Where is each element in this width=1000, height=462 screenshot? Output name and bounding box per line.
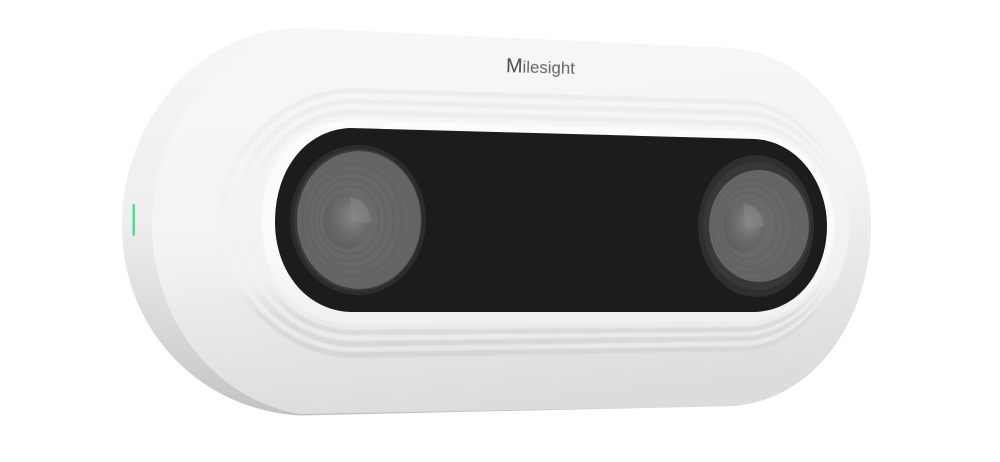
black window <box>275 128 827 312</box>
Milesight logo: Milesight <box>506 55 576 79</box>
front face <box>152 29 871 414</box>
concentric ridges <box>217 88 850 358</box>
green status LED <box>132 204 135 236</box>
left lens <box>290 145 426 295</box>
body side edge <box>122 28 871 416</box>
right lens <box>698 155 814 297</box>
camera body <box>122 28 871 416</box>
bright rim around window <box>262 120 834 324</box>
